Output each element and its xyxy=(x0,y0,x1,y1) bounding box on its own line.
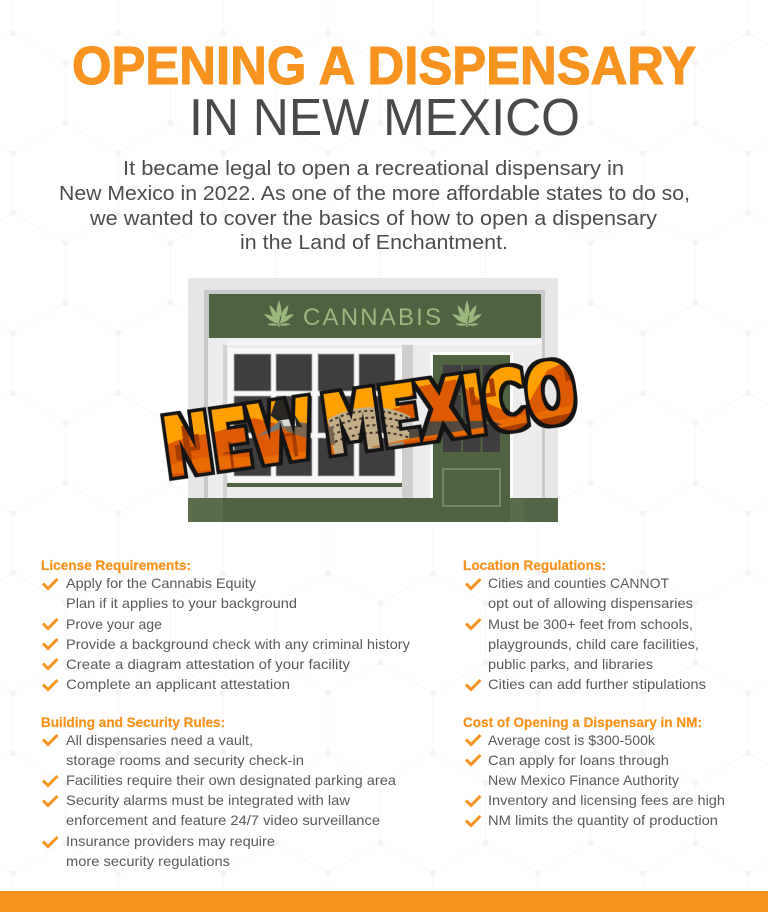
panel: building and security rules: more security regulations xyxy=(66,853,230,869)
door xyxy=(430,352,513,522)
panel: building and security rules: Insurance providers may require xyxy=(66,833,275,849)
panel: building and security rules: Building and Security Rules: xyxy=(41,714,225,730)
base xyxy=(188,498,558,522)
panel: location regulations: Must be 300+ feet from schools, xyxy=(488,616,693,632)
panel: license requirements: Complete an applicant attestation xyxy=(66,676,290,692)
intro paragraph: we wanted to cover the basics of how to open a dispensary xyxy=(89,207,658,230)
panel: cost of opening a dispensary: Inventory and licensing fees are high xyxy=(488,792,725,808)
shop sign xyxy=(209,294,541,338)
window xyxy=(227,348,402,487)
panel: building and security rules xyxy=(41,714,396,869)
intro paragraph: in the Land of Enchantment. xyxy=(240,231,508,254)
panel: license requirements: License Requirements: xyxy=(41,557,191,573)
shop sign: CANNABIS xyxy=(303,304,441,331)
panel: cost of opening a dispensary: New Mexico Finance Authority xyxy=(488,772,679,788)
title: OPENING A DISPENSARY xyxy=(72,36,696,96)
intro paragraph: New Mexico in 2022. As one of the more affordable states to do so, xyxy=(59,182,690,205)
panel: location regulations: public parks, and libraries xyxy=(488,656,653,672)
panel: license requirements: Prove your age xyxy=(66,616,162,632)
New Mexico banner lettering with desert scene and roadrunner: MEXICO xyxy=(317,345,582,473)
title: IN NEW MEXICO xyxy=(189,89,580,147)
storefront illustration xyxy=(188,278,558,522)
panel: location regulations: Location Regulations: xyxy=(463,557,606,573)
New Mexico banner lettering with desert scene and roadrunner: NEW xyxy=(158,382,319,495)
panel: license requirements: Provide a background check with any criminal history xyxy=(66,636,410,652)
panel: location regulations: Cities and counties CANNOT xyxy=(488,575,669,591)
title xyxy=(72,36,696,147)
New Mexico banner lettering with desert scene and roadrunner xyxy=(158,345,582,495)
intro paragraph: It became legal to open a recreational dispensary in xyxy=(123,157,624,180)
panel: building and security rules: Facilities require their own designated parking area xyxy=(66,772,396,788)
panel: license requirements: Apply for the Cannabis Equity xyxy=(66,575,256,591)
panel: cost of opening a dispensary: Can apply for loans through xyxy=(488,752,669,768)
panel: location regulations: opt out of allowing dispensaries xyxy=(488,595,693,611)
panel: cost of opening a dispensary xyxy=(463,714,725,828)
panel: license requirements xyxy=(41,557,410,692)
panel: cost of opening a dispensary: Cost of Opening a Dispensary in NM: xyxy=(463,714,702,730)
panel: building and security rules: All dispensaries need a vault, xyxy=(66,732,253,748)
panel: location regulations: Cities can add further stipulations xyxy=(488,676,706,692)
panel: location regulations: playgrounds, child care facilities, xyxy=(488,636,699,652)
intro paragraph xyxy=(59,157,690,254)
panel: building and security rules: Security alarms must be integrated with law xyxy=(66,792,351,808)
panel: building and security rules: storage rooms and security check-in xyxy=(66,752,304,768)
panel: location regulations xyxy=(463,557,706,692)
panel: license requirements: Create a diagram attestation of your facility xyxy=(66,656,350,672)
footer bar xyxy=(0,891,768,912)
panel: license requirements: Plan if it applies to your background xyxy=(66,595,297,611)
panel: cost of opening a dispensary: NM limits the quantity of production xyxy=(488,812,718,828)
panel: cost of opening a dispensary: Average cost is $300-500k xyxy=(488,732,656,748)
panel: building and security rules: enforcement and feature 24/7 video surveillance xyxy=(66,812,380,828)
